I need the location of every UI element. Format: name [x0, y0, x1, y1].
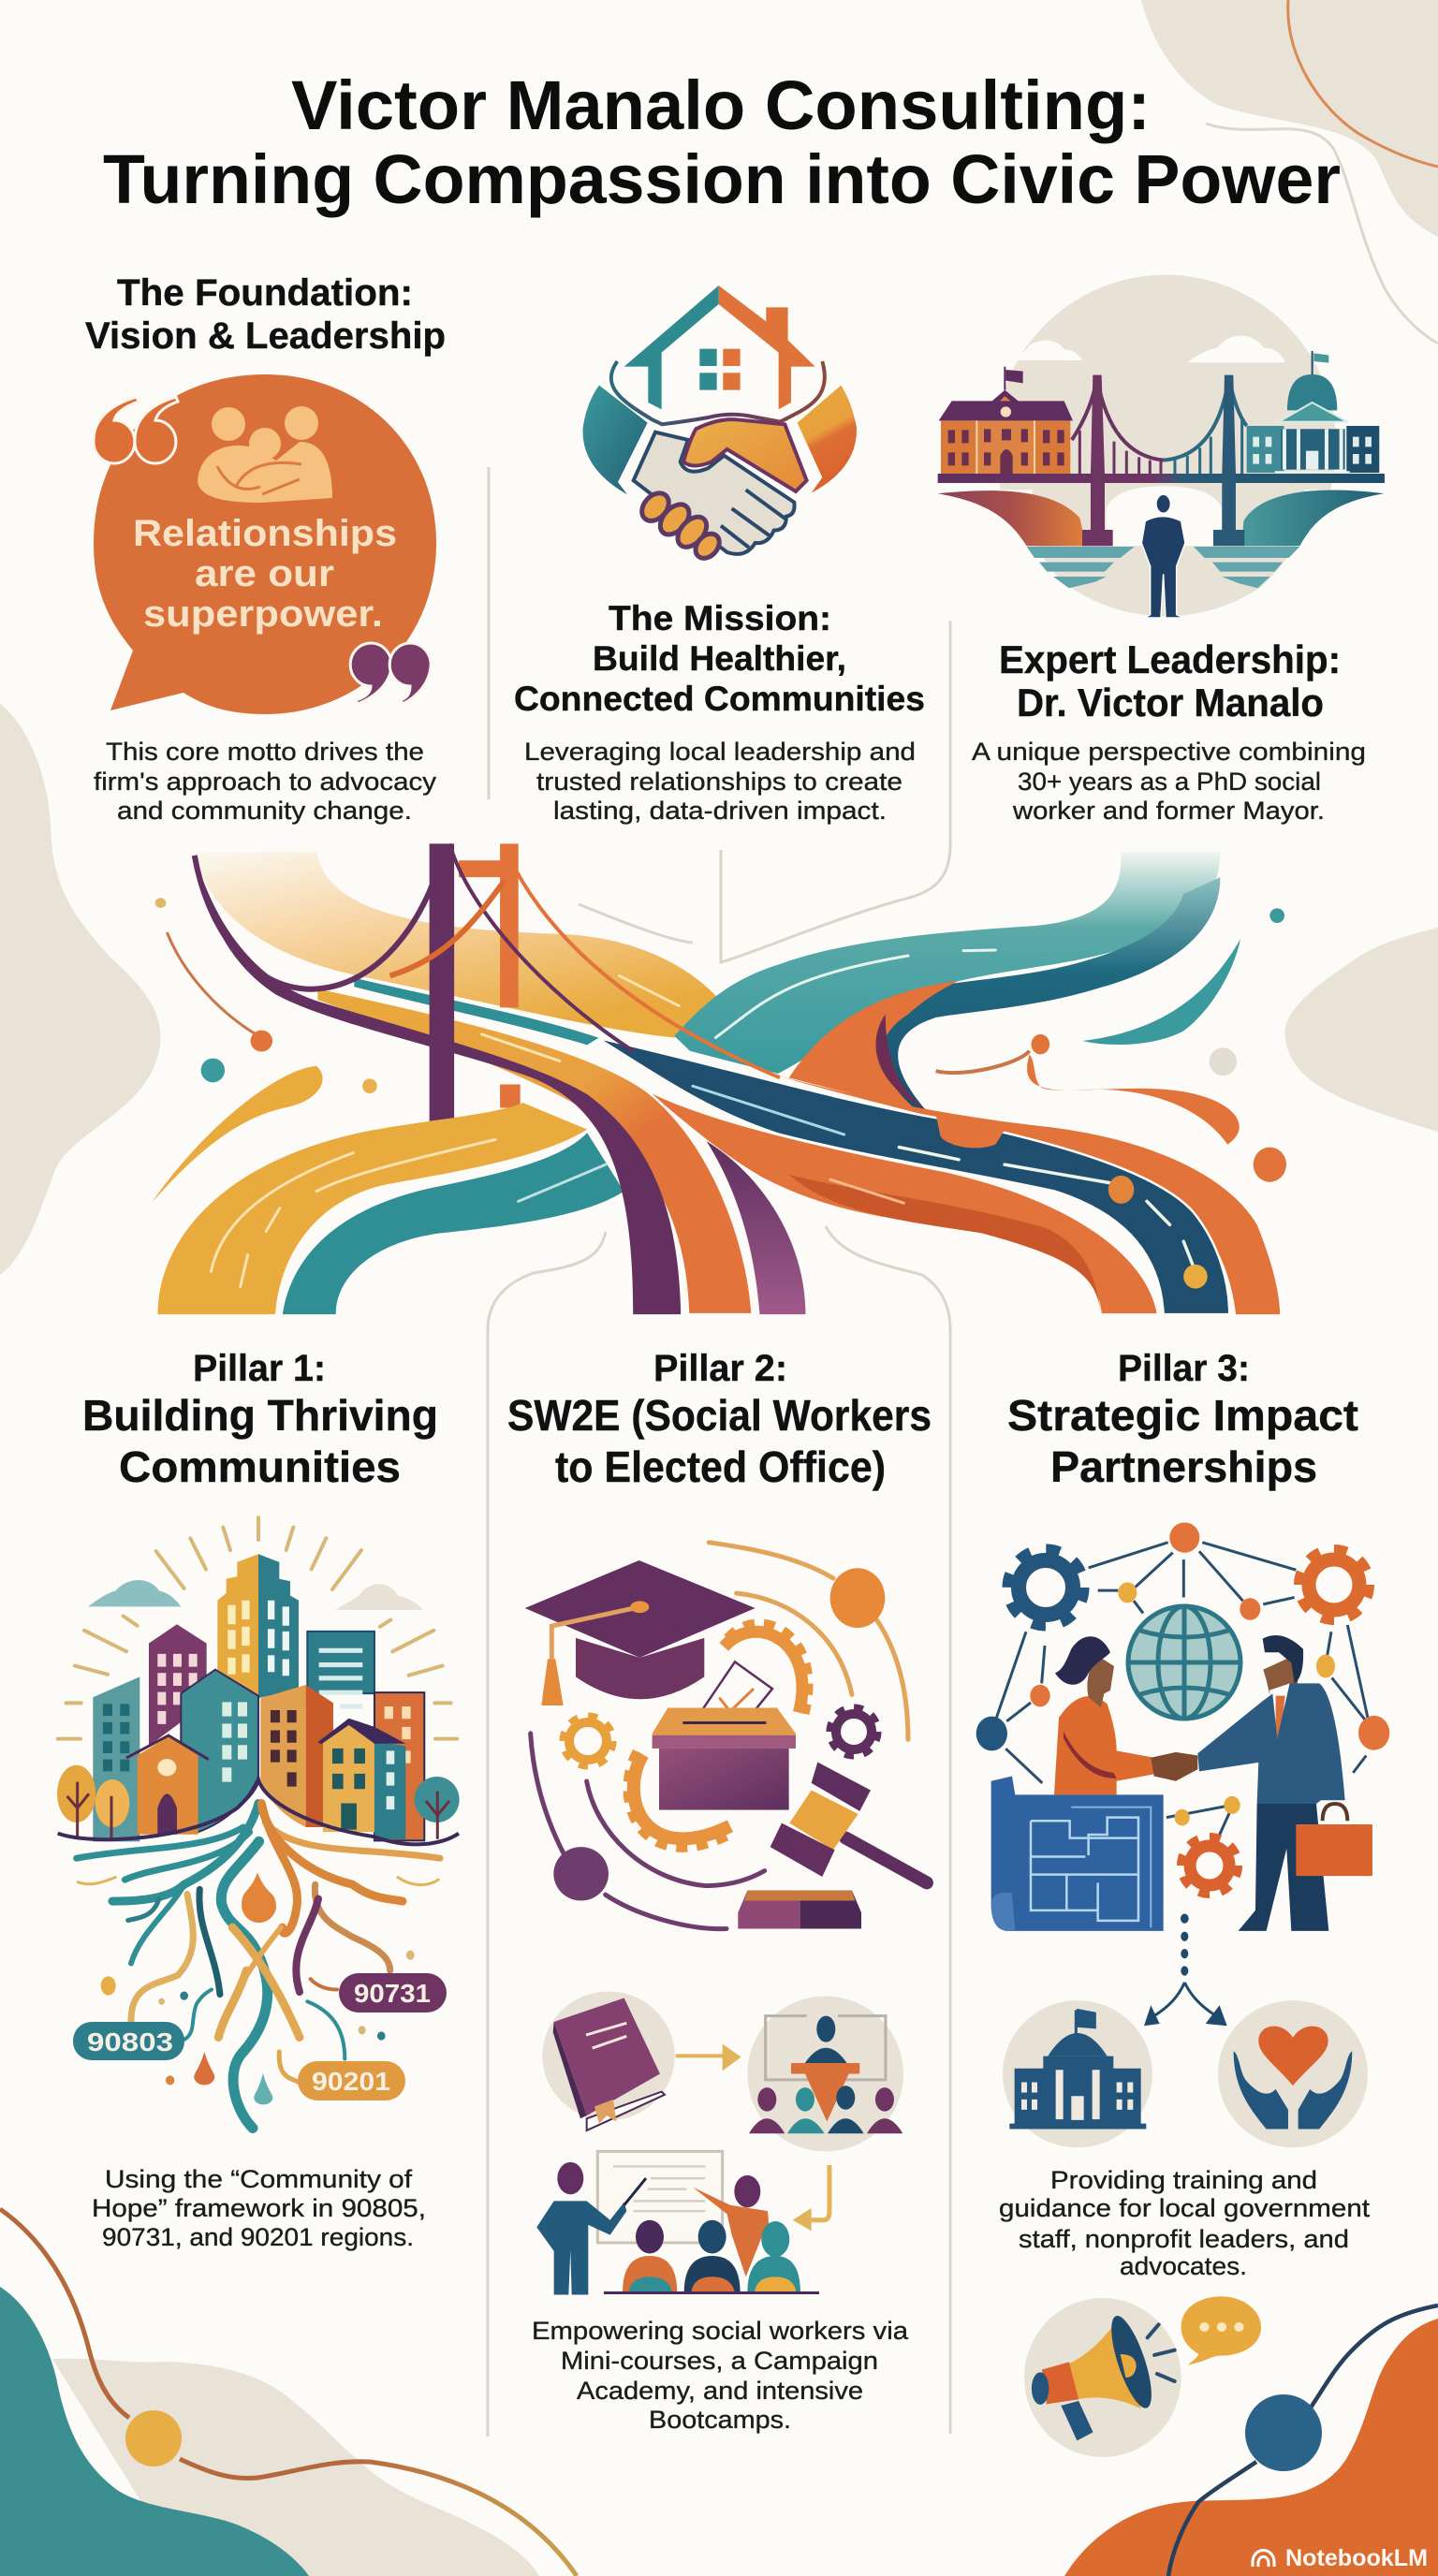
beige circle backdrop: [995, 275, 1336, 616]
text: expert description: A unique perspective combining: [972, 738, 1366, 766]
panel: expert leadership: [927, 275, 1395, 825]
decorative curve with yellow node: [0, 2209, 577, 2576]
text: pillar 2 description: Mini-courses, a Campaign: [561, 2347, 878, 2375]
background blob: bottom left: [0, 2209, 577, 2576]
text: foundation description: firm's approach to advocacy: [94, 768, 437, 796]
text: mission description: Leveraging local leadership and: [524, 738, 916, 766]
icon: city with roots: [57, 1517, 460, 2128]
icon: workshop with presenter: [536, 2151, 819, 2294]
icon: megaphone in circle with speech bubble: [1024, 2296, 1261, 2457]
motto text: [133, 513, 397, 635]
text: pillar 2 description: [532, 2317, 909, 2434]
capitol building: [1247, 351, 1379, 475]
orange right building: [374, 1692, 424, 1840]
suspenders and cables: [1072, 377, 1247, 475]
sleeve left: [583, 386, 648, 494]
right mound: [1242, 490, 1384, 546]
icon: heart in hands: [1234, 2027, 1352, 2129]
text: foundation description: and community change.: [117, 797, 412, 825]
yellow-orange middle lane: [316, 988, 753, 1314]
orange center building: [260, 1685, 333, 1827]
teal roots: [77, 1804, 268, 2128]
ground line: [58, 1779, 459, 1844]
background blob: right: [1284, 928, 1438, 1132]
heading: expert leadership: [999, 637, 1341, 724]
gavel: [738, 1763, 927, 1928]
orange small house: [126, 1735, 209, 1835]
connecting arcs: [531, 1543, 908, 1929]
background blob: left: [0, 704, 160, 1275]
label: 90201: 90201: [312, 2067, 390, 2096]
panel: pillar 2: [507, 1348, 932, 2434]
yellow house: [317, 1719, 405, 1839]
teal bridge lane: [353, 977, 601, 1046]
decorative curve with navy node: [1168, 2305, 1438, 2576]
purple building: [149, 1624, 207, 1746]
dotted connector with split arrows: [1144, 1913, 1227, 2026]
teal center house: [181, 1670, 258, 1832]
text: pillar 1 description: Using the “Community of: [105, 2165, 413, 2193]
sleeve right: [798, 386, 857, 493]
bridge towers: [1082, 375, 1244, 546]
icon: small orange gear: [1181, 1837, 1239, 1895]
central illustration: converging roads and bridge: [152, 843, 1286, 1314]
text: expert description: [972, 738, 1366, 825]
icon: cap, ballot box and gavel: [525, 1543, 927, 2294]
background blob: bottom right: [1064, 2305, 1438, 2576]
text: mission description: [524, 738, 916, 825]
purple road: [195, 856, 681, 1314]
dark teal office: [307, 1632, 374, 1709]
text: pillar 3 description: advocates.: [1120, 2252, 1247, 2280]
heading: the foundation: The Foundation:: [117, 272, 413, 314]
white lower corners outside circle: [927, 490, 1395, 621]
heart circle: [1218, 2000, 1368, 2147]
purple tower front: [430, 843, 454, 1121]
text: pillar 2 description: Academy, and intensive: [577, 2377, 863, 2405]
orange upper road: [789, 981, 959, 1111]
icon: partnership network: [976, 1522, 1389, 2147]
orange hand: [683, 419, 807, 491]
text: mission description: lasting, data-driven impact.: [553, 797, 887, 825]
teal lower road: [283, 1133, 624, 1314]
heading: pillar 3: Strategic Impact: [1007, 1391, 1358, 1440]
graduation cap: [525, 1560, 756, 1705]
roof right with chimney: [719, 285, 815, 409]
icon: book: [553, 1998, 665, 2130]
blueprint: [991, 1777, 1164, 1931]
icon: globe: [1128, 1606, 1240, 1719]
heading: the foundation: Vision & Leadership: [85, 315, 446, 357]
flame and drops: [101, 1873, 415, 2104]
background blob: top right: [1141, 0, 1438, 344]
figure: standing leader: [1141, 494, 1185, 618]
heading: pillar 2: Pillar 2:: [653, 1348, 787, 1389]
book circle: [542, 1991, 675, 2120]
heading: pillar 1: [82, 1348, 438, 1491]
teal upper road: [674, 852, 1220, 1074]
sun rays: [58, 1517, 457, 1739]
text: pillar 3 description: [999, 2166, 1371, 2280]
motto text: are our: [195, 553, 334, 594]
icon: capitol: [1009, 2010, 1146, 2129]
icon: opening quote mark: [94, 397, 178, 463]
text: pillar 1 description: 90731, and 90201 regions.: [102, 2223, 414, 2251]
finger lines: [721, 490, 786, 548]
text: expert description: worker and former Mayor.: [1012, 797, 1325, 825]
heading: pillar 3: [1007, 1348, 1358, 1491]
text: pillar 1 description: Hope” framework in 90805,: [92, 2194, 426, 2222]
bridge deck: [938, 474, 1385, 483]
navy upper road: [846, 877, 1220, 1111]
heading: the mission: [514, 599, 925, 718]
heading: pillar 1: Building Thriving: [82, 1391, 438, 1440]
man: [1151, 1635, 1372, 1931]
icon: yellow gear: [563, 1716, 613, 1766]
orange lower-left lane: [642, 1088, 1158, 1314]
orange outer road: [780, 1076, 1280, 1314]
icon: closing quote mark: [350, 643, 431, 704]
text: mission description: trusted relationships to create: [536, 768, 902, 796]
watermark: NotebookLM: NotebookLM: [1285, 2545, 1428, 2571]
label: 90201: [298, 2061, 405, 2100]
orange drip: [936, 1115, 1009, 1148]
label: 90731: 90731: [354, 1979, 431, 2008]
pale yellow road fading at top: [195, 852, 717, 1037]
fingers: [637, 488, 724, 563]
panel: pillar 1: [57, 1348, 460, 2251]
text: expert description: 30+ years as a PhD social: [1018, 768, 1321, 796]
icon: network gears and globe: [1007, 1549, 1370, 1895]
white arch: [1107, 486, 1222, 546]
panel: pillar 3: [976, 1348, 1389, 2457]
heading: pillar 1: Communities: [119, 1442, 401, 1491]
icon: house over handshake: [583, 285, 857, 563]
hands outline band: [611, 361, 825, 424]
heading: pillar 3: Partnerships: [1050, 1442, 1317, 1491]
school building: [939, 367, 1073, 474]
road nodes: [1108, 1176, 1208, 1289]
label: 90731: [339, 1973, 447, 2012]
speaker circle: [747, 1997, 903, 2151]
megaphone: [1032, 2312, 1175, 2440]
motto text: superpower.: [143, 593, 383, 635]
heading: the foundation: [85, 272, 446, 357]
floating accents: [152, 898, 1286, 1203]
clouds: [1013, 336, 1285, 362]
column dividers and road connectors: [488, 467, 950, 2437]
icon: orange gear: [1299, 1549, 1370, 1620]
label: 90803: 90803: [87, 2027, 173, 2056]
pill connectors: [184, 1979, 345, 2083]
panel: the mission: [514, 285, 925, 825]
teal left building: [93, 1676, 139, 1841]
title: Victor Manalo Consulting:: [291, 66, 1151, 144]
bridge cables: [195, 843, 780, 1077]
heading: the mission: Connected Communities: [514, 680, 925, 718]
arrow: elbow to workshop: [793, 2165, 829, 2231]
icon: speaker and audience: [749, 2016, 902, 2133]
heading: expert leadership: Expert Leadership:: [999, 637, 1341, 681]
icon: navy gear: [1007, 1549, 1084, 1626]
icon: purple gear: [829, 1707, 878, 1756]
orange tower back: [459, 843, 521, 1107]
small gears: [563, 1707, 878, 1766]
heading: the mission: The Mission:: [609, 599, 831, 637]
icon: embracing people: [198, 406, 332, 503]
text: pillar 3 description: staff, nonprofit leaders, and: [1019, 2225, 1349, 2253]
clouds: [88, 1580, 181, 1606]
text: pillar 3 description: Providing training and: [1050, 2166, 1317, 2194]
heading: pillar 2: SW2E (Social Workers: [507, 1391, 932, 1440]
roof left: [624, 285, 719, 409]
orange gear arcs: [627, 1623, 809, 1848]
heading: pillar 1: Pillar 1:: [193, 1348, 326, 1389]
left mound: [938, 490, 1086, 546]
heading: pillar 3: Pillar 3:: [1118, 1348, 1250, 1389]
heading: pillar 2: to Elected Office): [555, 1442, 886, 1491]
house windows: [699, 349, 741, 390]
speech bubble with motto: [94, 374, 436, 714]
woman: [1054, 1636, 1154, 1794]
panel: the foundation: [85, 272, 446, 825]
text: pillar 2 description: Empowering social workers via: [532, 2317, 909, 2345]
heading: pillar 2: [507, 1348, 932, 1491]
icon: bridge between school and capitol with figure: [927, 275, 1395, 621]
navy road: [596, 1037, 1229, 1314]
heading: the mission: Build Healthier,: [593, 639, 846, 678]
yellow lower road: [158, 1103, 587, 1314]
ballot box: [653, 1661, 796, 1810]
text: foundation description: [94, 738, 437, 825]
water stripes: [1027, 547, 1299, 588]
heading: expert leadership: Dr. Victor Manalo: [1017, 681, 1324, 724]
orange roots: [78, 1804, 440, 2038]
network nodes: [976, 1522, 1389, 1825]
text: pillar 2 description: Bootcamps.: [649, 2406, 791, 2434]
network lines: [996, 1543, 1368, 1835]
capitol circle: [1003, 2000, 1152, 2147]
text: pillar 3 description: guidance for local government: [999, 2194, 1371, 2222]
text: foundation description: This core motto drives the: [106, 738, 424, 766]
tall tower: [217, 1554, 299, 1698]
pale hand: [634, 432, 795, 554]
motto text: Relationships: [133, 513, 397, 554]
text: pillar 1 description: [92, 2165, 426, 2251]
title: Turning Compassion into Civic Power: [103, 140, 1341, 218]
speech bubble: [1181, 2296, 1261, 2365]
title: [103, 66, 1341, 218]
arrow: book to speaker: [676, 2044, 741, 2071]
road highlights: [211, 950, 1193, 1286]
trees: [57, 1765, 460, 1839]
label: 90803: [73, 2022, 184, 2060]
second purple lane: [707, 1141, 805, 1314]
